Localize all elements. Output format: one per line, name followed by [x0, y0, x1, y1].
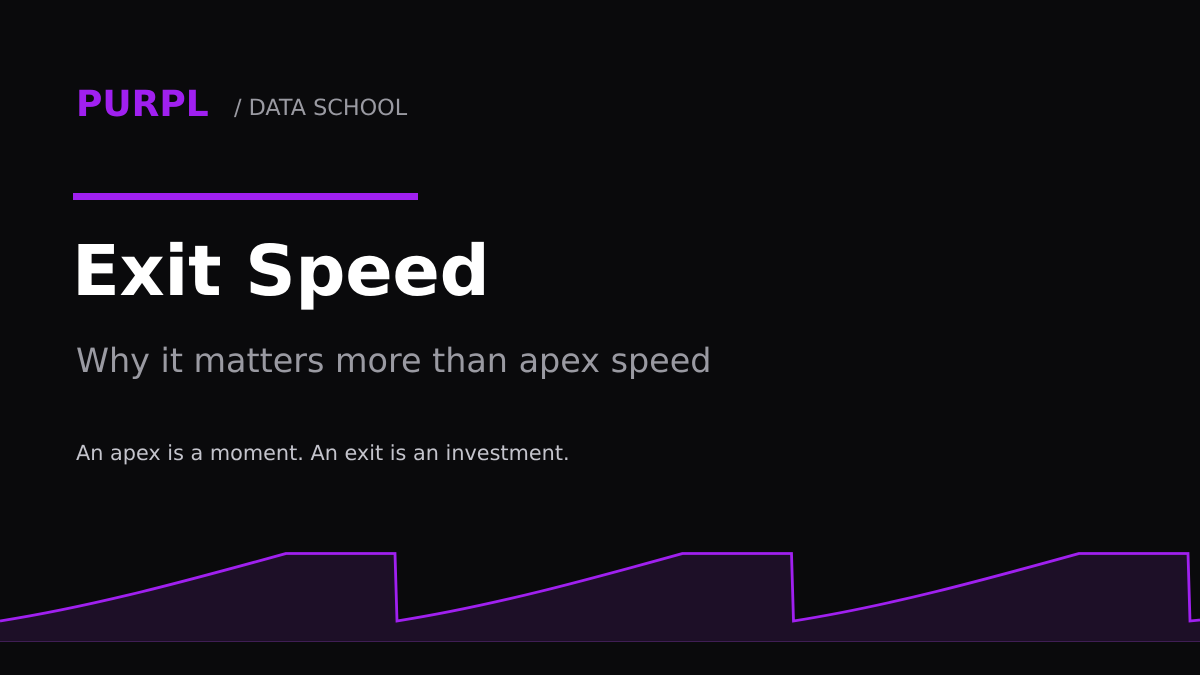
accent bar — [73, 193, 418, 200]
brand name: PURPL — [76, 84, 209, 125]
subtitle: Why it matters more than apex speed — [76, 340, 711, 380]
tagline: An apex is a moment. An exit is an investment. — [76, 440, 570, 464]
title: Exit Speed — [72, 230, 489, 312]
brand section label: / DATA SCHOOL — [234, 95, 407, 121]
